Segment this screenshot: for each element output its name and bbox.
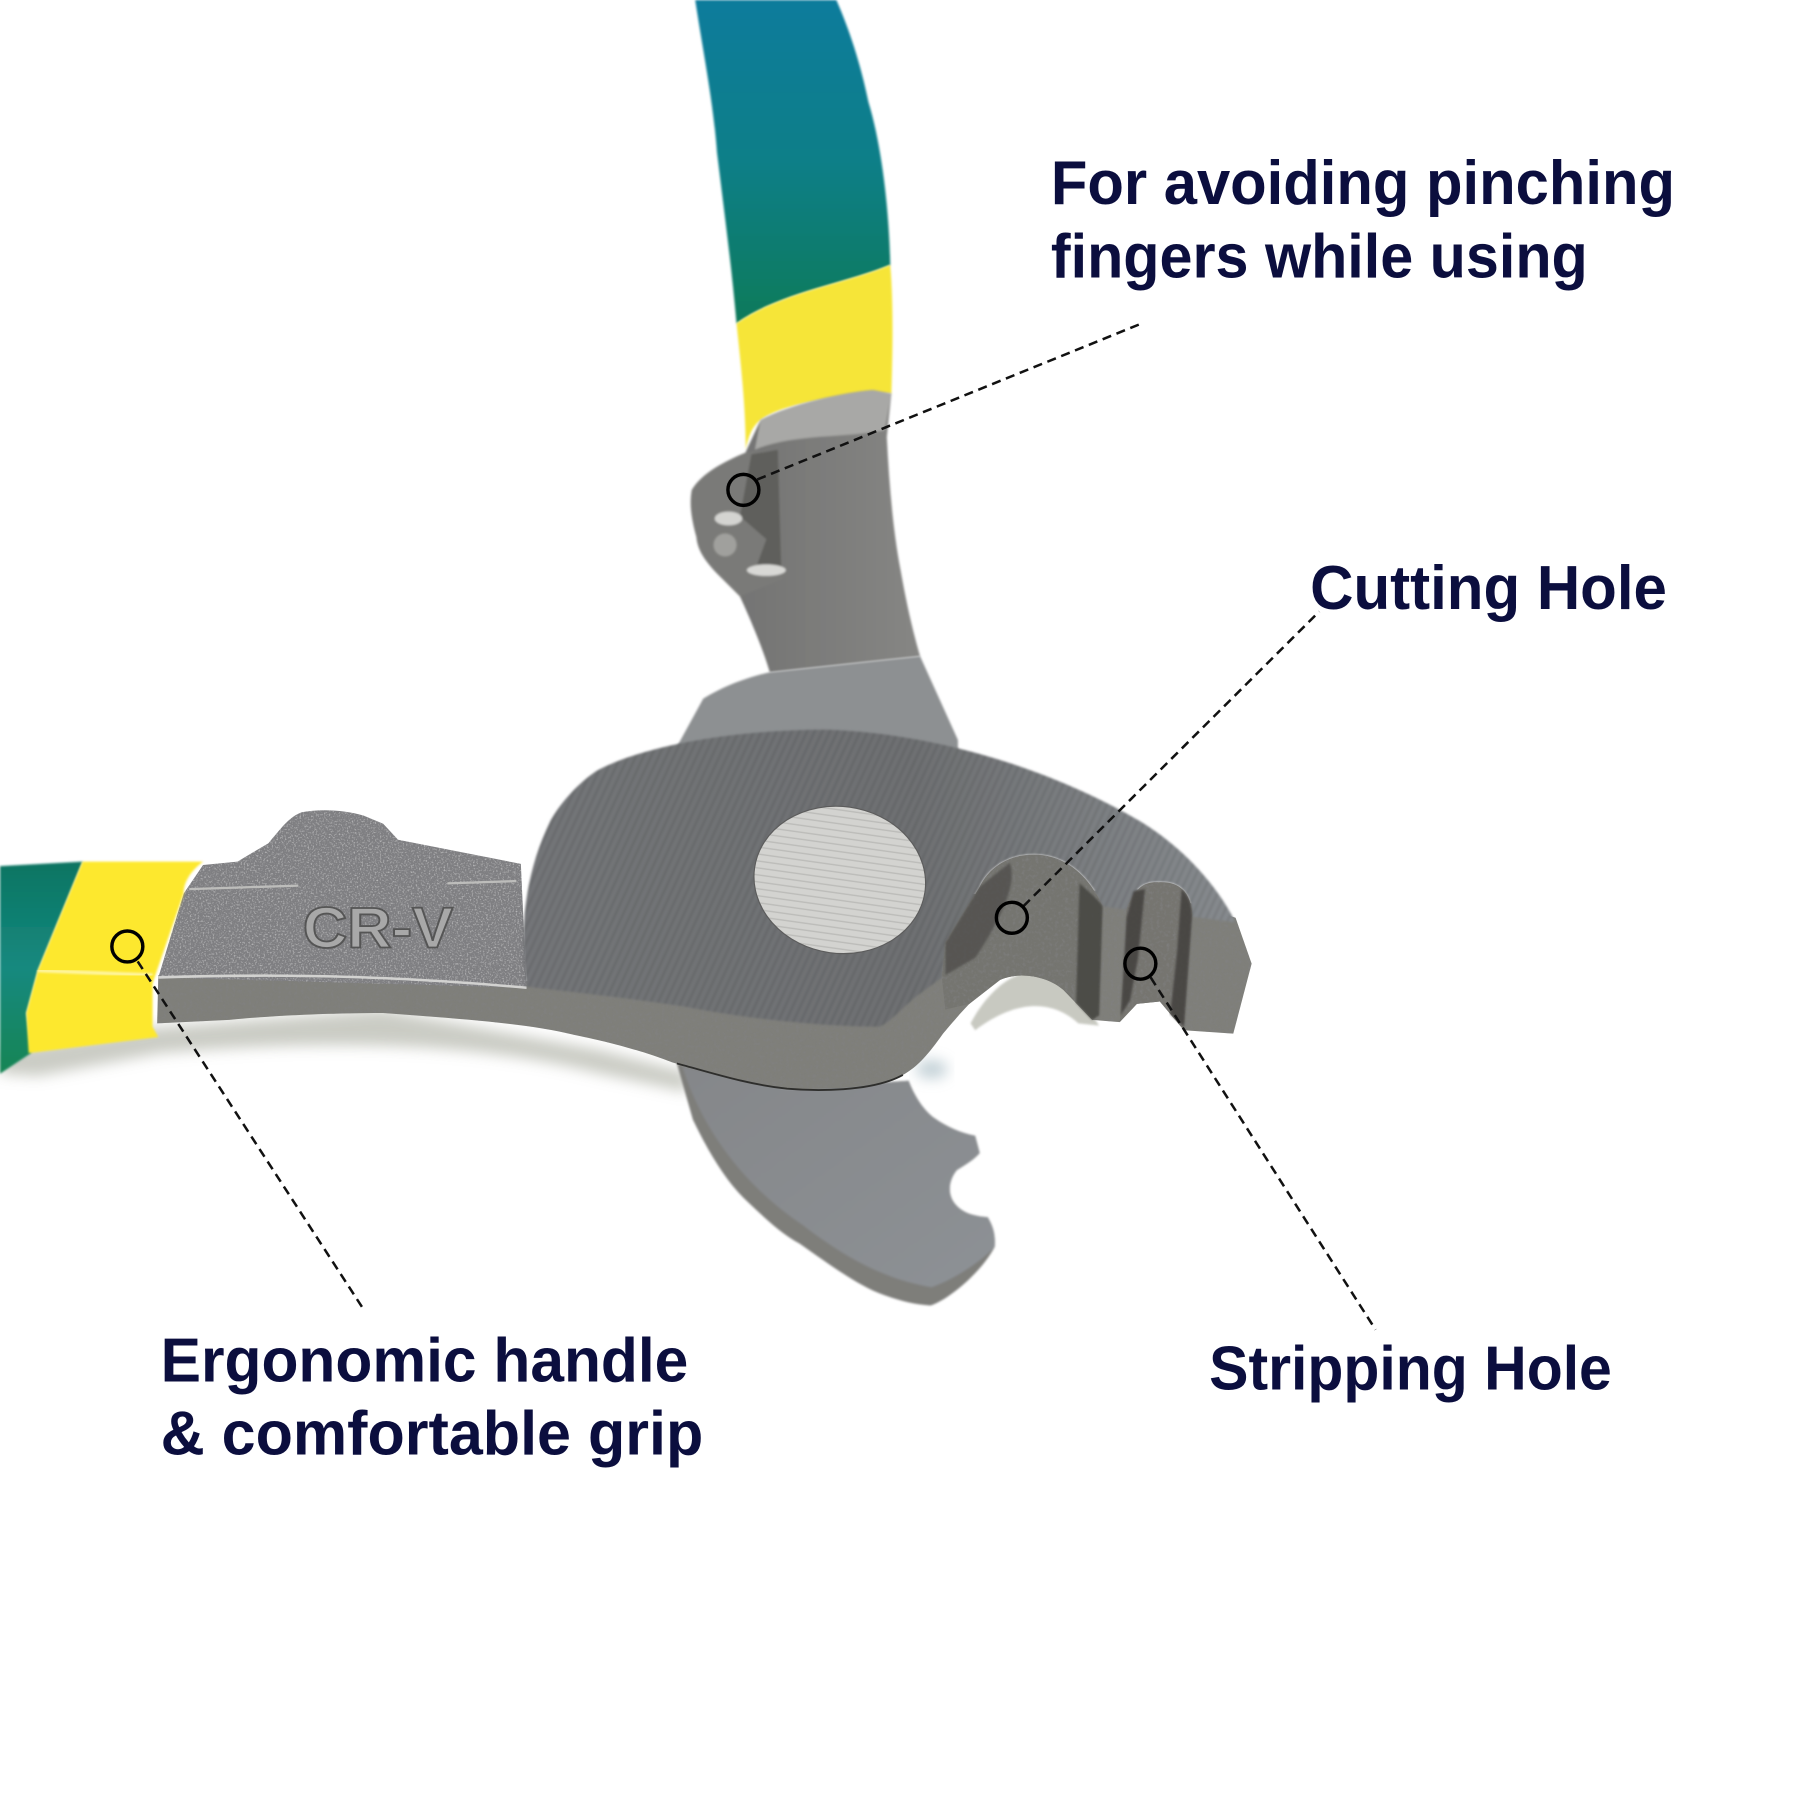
finger guard: [691, 450, 782, 597]
callout: finger guard: [728, 324, 1141, 505]
heading: finger guard label: For avoiding pinching: [1051, 149, 1675, 218]
rear jaw: [677, 656, 958, 757]
pivot pin: [744, 795, 935, 965]
soft shadow under tool: [0, 1010, 688, 1092]
callout: ergonomic handle: [112, 931, 365, 1311]
stripping hole interior: [1120, 882, 1192, 1030]
leader line: [1023, 611, 1319, 906]
forged lower body: [157, 889, 1252, 1089]
marker ring: [728, 474, 759, 505]
heading: ergonomic handle label: Ergonomic handle: [161, 1326, 688, 1395]
callout: stripping hole: [1125, 948, 1376, 1330]
callout: cutting hole: [996, 611, 1319, 933]
heading: ergonomic handle label: [161, 1326, 703, 1469]
shadow inside cutting opening: [971, 972, 1099, 1030]
left handle grip: [0, 862, 83, 1074]
division line between jaws: [677, 1063, 903, 1090]
upper arm: [691, 390, 920, 672]
handle steel with CR-V stamp: [158, 810, 527, 988]
left handle yellow band: [26, 862, 203, 1053]
pivot head face: [523, 730, 1236, 1027]
marker ring: [1125, 948, 1156, 979]
upper handle grip: [695, 0, 890, 324]
lower rear jaw: [677, 1063, 995, 1306]
CR-V stamp: CR-V: [303, 897, 453, 961]
cutting hole interior: [942, 855, 1102, 1020]
heading: finger guard label: [1051, 149, 1675, 292]
marker ring: [996, 902, 1027, 933]
leader line: [757, 324, 1141, 480]
blue reflection under head: [915, 1060, 948, 1078]
heading: finger guard label: fingers while using: [1051, 223, 1588, 292]
leader line: [138, 961, 365, 1311]
heading: stripping hole label: Stripping Hole: [1209, 1334, 1612, 1403]
heading: ergonomic handle label: & comfortable grip: [161, 1400, 703, 1469]
product photo: cable cutter: [0, 0, 1252, 1306]
upper handle yellow band: [737, 265, 893, 450]
yellow band highlight: [38, 971, 153, 975]
heading: cutting hole label: Cutting Hole: [1310, 554, 1667, 623]
leader line: [1151, 977, 1376, 1330]
marker ring: [112, 931, 143, 962]
